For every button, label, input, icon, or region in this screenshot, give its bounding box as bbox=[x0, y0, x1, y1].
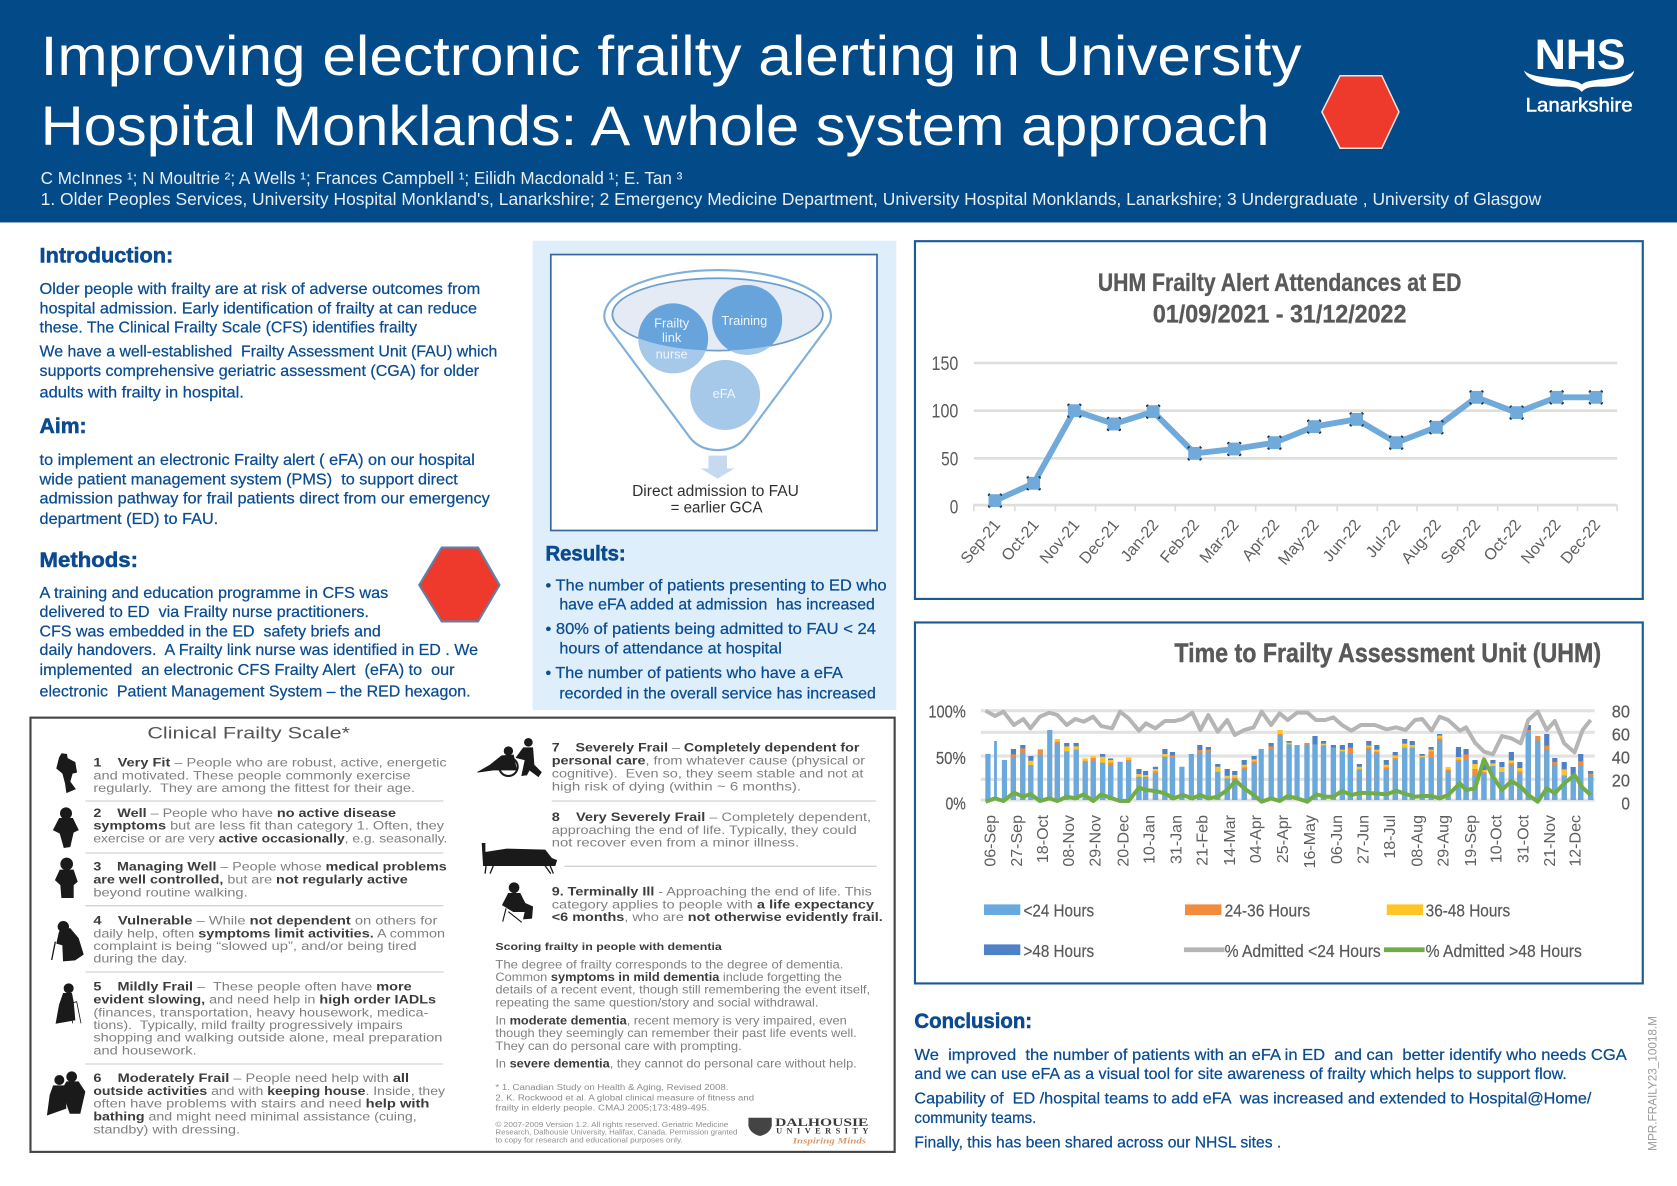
left axis labels bbox=[928, 703, 966, 813]
text block: results bullets: • 80% of patients being admitted to FAU < 24 bbox=[545, 621, 876, 638]
panel: aim bbox=[39, 415, 490, 528]
panel: funnel and results bbox=[533, 241, 896, 710]
y axis labels: 100 bbox=[932, 402, 958, 423]
x axis labels: Jan-22 bbox=[1117, 516, 1162, 565]
scale entries 7 to 9: 7 Severely Frail – Completely dependent for bbox=[552, 742, 860, 755]
scale entries 7 to 9 bbox=[552, 742, 883, 924]
x axis labels: Feb-22 bbox=[1157, 516, 1203, 567]
legend: <24 Hours bbox=[1024, 902, 1094, 921]
heading: results: Results: bbox=[545, 542, 626, 565]
text block: results bullets: • The number of patients presenting to ED who bbox=[545, 577, 887, 594]
x axis date labels: 31-Oct bbox=[1514, 814, 1532, 863]
x axis labels: Oct-21 bbox=[998, 516, 1043, 565]
right axis labels: 40 bbox=[1612, 749, 1630, 768]
text block: references: © 2007-2009 Version 1.2. All rights reserved. Geriatric Medicine bbox=[495, 1121, 729, 1129]
text block: results bullets bbox=[545, 577, 887, 702]
text block: references: to copy for research and educational purposes only. bbox=[495, 1137, 683, 1144]
text block: scoring frailty in dementia: The degree of frailty corresponds to the degree of dementia. bbox=[495, 958, 843, 971]
legend: 24-36 Hours bbox=[1225, 902, 1310, 921]
icons: frailty silhouettes 7 to 9 bbox=[477, 738, 557, 922]
scale entries 1 to 6: exercise or are very active occasionally , e.g. seasonally. bbox=[93, 833, 447, 846]
text block: scoring frailty in dementia: details of a recent event, though still remembering the event itself, bbox=[495, 984, 870, 997]
text block: conclusion bbox=[914, 1047, 1627, 1152]
text block: introduction: adults with frailty in hospital. bbox=[40, 385, 244, 402]
text block: aim: wide patient management system (PMS) to support direct bbox=[39, 471, 458, 488]
scale entries 1 to 6: 5 Mildly Frail – These people often have more bbox=[93, 981, 412, 994]
text block: aim: to implement an electronic Frailty alert ( eFA) on our hospital bbox=[40, 452, 475, 469]
text block: scoring frailty in dementia bbox=[495, 942, 870, 1071]
legend: % Admitted <24 Hours bbox=[1225, 942, 1381, 961]
x axis date labels: 12-Dec bbox=[1567, 815, 1585, 867]
x axis date labels: 20-Dec bbox=[1114, 815, 1132, 867]
scale entries 1 to 6: beyond routine walking. bbox=[93, 886, 248, 899]
scale entries 1 to 6: 2 Well – People who have no active disease bbox=[93, 807, 397, 820]
x axis labels: Mar-22 bbox=[1196, 516, 1243, 567]
right axis labels: 80 bbox=[1612, 703, 1630, 722]
scale entries 1 to 6: outside activities and with keeping house . Inside, they bbox=[93, 1085, 445, 1098]
text block: scoring frailty in dementia: Scoring frailty in people with dementia bbox=[495, 942, 722, 953]
scale entries 7 to 9: high risk of dying (within ~ 6 months). bbox=[552, 780, 801, 793]
text block: references bbox=[495, 1083, 754, 1144]
text block: methods: A training and education programme in CFS was bbox=[40, 585, 388, 602]
scale title: Clinical Frailty Scale* bbox=[147, 723, 351, 742]
x axis labels: Dec-22 bbox=[1557, 516, 1604, 567]
title bbox=[41, 25, 1302, 157]
x axis labels: May-22 bbox=[1275, 516, 1323, 569]
funnel diagram: Frailty bbox=[654, 315, 690, 330]
text block: methods bbox=[40, 585, 478, 700]
chart title: UHM Frailty Alert Attendances at ED bbox=[1098, 270, 1461, 297]
right column of scale bbox=[477, 738, 883, 1146]
scale entries 1 to 6: are well controlled, but are not regularly active bbox=[93, 874, 408, 887]
data markers bbox=[989, 391, 1602, 507]
panel: line chart of frailty alert attendances bbox=[915, 241, 1643, 599]
authors: C McInnes ¹; N Moultrie ²; A Wells ¹; Frances Campbell ¹; Eilidh Macdonald ¹; E. Tan ³ bbox=[41, 169, 683, 188]
text block: introduction bbox=[40, 281, 497, 402]
data line bbox=[995, 397, 1596, 501]
x axis date labels: 21-Nov bbox=[1541, 815, 1559, 867]
scale entries 1 to 6: symptoms but are less fit than category 1. Often, they bbox=[93, 820, 444, 833]
scale entries 1 to 6: evident slowing, and need help in high order IADLs bbox=[93, 994, 436, 1007]
x axis date labels bbox=[982, 814, 1585, 868]
heading: aim: Aim: bbox=[40, 415, 87, 438]
funnel caption: = earlier GCA bbox=[671, 500, 763, 517]
left axis labels: 100% bbox=[928, 703, 966, 722]
text block: conclusion: Capability of ED /hospital teams to add eFA was increased and extended to Hospital@Home/ bbox=[914, 1091, 1592, 1108]
text block: scoring frailty in dementia: Common symptoms in mild dementia include forgetting the bbox=[495, 971, 842, 984]
x axis date labels: 31-Jan bbox=[1167, 815, 1185, 864]
affiliations: 1. Older Peoples Services, University Hospital Monkland's, Lanarkshire; 2 Emergency Medicine Department, University Hospital Monklands, Lanarkshire; 3 Undergraduate , University of Glasgow bbox=[41, 190, 1542, 209]
legend: 36-48 Hours bbox=[1426, 902, 1510, 921]
icon: red hexagon bbox=[419, 548, 499, 621]
text block: references: frailty in elderly people. CMAJ 2005;173:489-495. bbox=[495, 1104, 709, 1113]
stacked bars and lines bbox=[986, 711, 1591, 802]
scale entries 7 to 9: <6 months , who are not otherwise evidently frail. bbox=[552, 911, 883, 924]
panel: conclusion bbox=[914, 1010, 1627, 1152]
logo: Dalhousie University: UNIVERSITY bbox=[776, 1127, 868, 1136]
right axis labels: 60 bbox=[1612, 726, 1630, 745]
right axis labels bbox=[1612, 703, 1630, 813]
x axis labels: Sep-21 bbox=[957, 516, 1004, 567]
text block: methods: delivered to ED via Frailty nurse practitioners. bbox=[40, 604, 369, 621]
x axis labels: Jul-22 bbox=[1362, 516, 1404, 561]
text block: scoring frailty in dementia: In severe dementia, they cannot do personal care without help. bbox=[495, 1058, 857, 1071]
x axis date labels: 14-Mar bbox=[1221, 814, 1239, 866]
line: percent admitted over 48 hours bbox=[986, 759, 1591, 802]
funnel diagram: Training bbox=[721, 313, 767, 328]
funnel caption: Direct admission to FAU bbox=[632, 483, 799, 500]
funnel diagram: nurse bbox=[656, 346, 688, 361]
text block: methods: implemented an electronic CFS Frailty Alert (eFA) to our bbox=[40, 662, 455, 679]
icon: red hexagon alert bbox=[1322, 76, 1399, 148]
logo: Dalhousie University: Inspiring Minds bbox=[791, 1137, 866, 1146]
y axis labels: 150 bbox=[932, 354, 958, 375]
title: Improving electronic frailty alerting in University bbox=[41, 25, 1302, 87]
text block: introduction: these. The Clinical Frailty Scale (CFS) identifies frailty bbox=[40, 319, 417, 336]
scale entries 1 to 6: 3 Managing Well – People whose medical problems bbox=[93, 861, 447, 874]
scale entries 1 to 6: daily help, often symptoms limit activities. A common bbox=[93, 927, 445, 940]
text block: results bullets: hours of attendance at hospital bbox=[559, 640, 782, 657]
scale entries 1 to 6: tions). Typically, mild frailty progressively impairs bbox=[93, 1019, 403, 1032]
panel: introduction bbox=[40, 245, 497, 402]
heading: conclusion: Conclusion: bbox=[914, 1010, 1032, 1033]
reference code: MPR.FRAILY23_10018.M bbox=[1646, 1016, 1660, 1151]
x axis date labels: 18-Jul bbox=[1381, 815, 1399, 859]
x axis date labels: 08-Nov bbox=[1060, 815, 1078, 867]
text block: results bullets: have eFA added at admission has increased bbox=[559, 597, 875, 614]
text block: scoring frailty in dementia: repeating the same question/story and social withdrawal. bbox=[495, 997, 818, 1010]
scale entries 7 to 9: approaching the end of life. Typically, they could bbox=[552, 824, 857, 837]
text block: references: * 1. Canadian Study on Health & Aging, Revised 2008. bbox=[495, 1083, 728, 1092]
scale entries 1 to 6: 4 Vulnerable – While not dependent on others for bbox=[93, 914, 438, 927]
arrow: funnel output bbox=[701, 456, 734, 479]
scale entries 7 to 9: 8 Very Severely Frail – Completely dependent, bbox=[552, 811, 871, 824]
logo: NHS Lanarkshire bbox=[1524, 31, 1634, 117]
x axis labels: Oct-22 bbox=[1480, 516, 1525, 565]
scale entries 1 to 6: bathing and might need minimal assistance (cuing, bbox=[93, 1110, 417, 1123]
funnel diagram: eFA bbox=[713, 386, 736, 401]
x axis date labels: 10-Oct bbox=[1488, 814, 1506, 863]
scale entries 1 to 6: (finances, transportation, heavy housework, medica- bbox=[93, 1006, 429, 1019]
text block: introduction: supports comprehensive geriatric assessment (CGA) for older bbox=[40, 363, 479, 380]
x axis date labels: 08-Aug bbox=[1408, 815, 1426, 867]
text block: references: Research, Dalhousie University, Halifax, Canada. Permission granted bbox=[495, 1130, 738, 1137]
text block: conclusion: Finally, this has been shared across our NHSL sites . bbox=[914, 1135, 1281, 1152]
y axis labels: 50 bbox=[941, 450, 958, 471]
y axis labels bbox=[932, 354, 958, 518]
funnel diagram: link bbox=[662, 330, 682, 345]
header banner bbox=[0, 0, 1677, 222]
scale entries 7 to 9: 9. Terminally Ill - Approaching the end of life. This bbox=[552, 885, 872, 898]
x axis labels: Jun-22 bbox=[1319, 516, 1365, 565]
logo: Dalhousie University bbox=[748, 1115, 868, 1146]
x axis labels: Sep-22 bbox=[1437, 516, 1484, 567]
scale entries 1 to 6: during the day. bbox=[93, 953, 187, 966]
right axis labels: 0 bbox=[1621, 794, 1630, 813]
funnel caption bbox=[632, 483, 799, 517]
scale entries 1 to 6: 6 Moderately Frail – People need help with all bbox=[93, 1072, 409, 1085]
text block: conclusion: community teams. bbox=[914, 1110, 1036, 1127]
text block: introduction: Older people with frailty are at risk of adverse outcomes from bbox=[40, 281, 480, 298]
scale entries 7 to 9: cognitive). Even so, they seem stable and not at bbox=[552, 767, 864, 780]
left axis labels: 50% bbox=[936, 749, 966, 768]
icons: frailty silhouettes 1 to 6 bbox=[47, 754, 85, 1115]
left axis labels: 0% bbox=[945, 794, 966, 813]
line: percent admitted under 24 hours bbox=[986, 711, 1591, 754]
x axis date labels: 27-Sep bbox=[1008, 815, 1026, 867]
chart title bbox=[1098, 270, 1461, 328]
scale entries 7 to 9: category applies to people with a life expectancy bbox=[552, 898, 875, 911]
text block: introduction: We have a well-established Frailty Assessment Unit (FAU) which bbox=[40, 344, 497, 361]
x axis labels bbox=[957, 516, 1604, 569]
heading: introduction: Introduction: bbox=[40, 245, 173, 268]
text block: methods: daily handovers. A Frailty link nurse was identified in ED . We bbox=[40, 642, 478, 659]
scale entries 1 to 6: 1 Very Fit – People who are robust, active, energetic bbox=[93, 757, 447, 770]
funnel diagram bbox=[551, 255, 877, 530]
text block: scoring frailty in dementia: In moderate dementia , recent memory is very impaired, even bbox=[495, 1014, 847, 1027]
text block: conclusion: and we can use eFA as a visual tool for site awareness of frailty which helps to support flow. bbox=[914, 1066, 1567, 1083]
text block: references: 2. K. Rockwood et al. A global clinical measure of fitness and bbox=[495, 1094, 754, 1103]
x axis date labels: 21-Feb bbox=[1193, 815, 1211, 866]
x axis date labels: 04-Apr bbox=[1247, 814, 1265, 863]
right axis labels: 20 bbox=[1612, 772, 1630, 791]
text block: aim: admission pathway for frail patients direct from our emergency bbox=[40, 491, 490, 508]
scale entries 1 to 6: and motivated. These people commonly exercise bbox=[93, 769, 411, 782]
scale entries 1 to 6: complaint is being “slowed up”, and/or being tired bbox=[93, 940, 417, 953]
scale entries 1 to 6 bbox=[93, 757, 447, 1136]
x axis date labels: 18-Oct bbox=[1034, 814, 1052, 863]
x axis labels: Apr-22 bbox=[1239, 516, 1283, 565]
panel: time to frailty assessment unit chart bbox=[915, 622, 1643, 983]
x axis labels: Nov-22 bbox=[1518, 516, 1565, 567]
text block: scoring frailty in dementia: They can do personal care with prompting. bbox=[495, 1040, 742, 1053]
chart title: Time to Frailty Assessment Unit (UHM) bbox=[1174, 638, 1601, 668]
x axis date labels: 25-Apr bbox=[1274, 814, 1292, 863]
x axis date labels: 06-Jun bbox=[1328, 815, 1346, 864]
x axis date labels: 06-Sep bbox=[982, 815, 1000, 867]
scale entries 1 to 6: standby) with dressing. bbox=[93, 1123, 240, 1136]
heading: methods: Methods: bbox=[40, 549, 138, 572]
x axis date labels: 27-Jun bbox=[1354, 815, 1372, 864]
x axis date labels: 29-Nov bbox=[1087, 815, 1105, 867]
scale entries 7 to 9: not recover even from a minor illness. bbox=[552, 837, 799, 850]
legend: >48 Hours bbox=[1024, 942, 1094, 961]
title: Hospital Monklands: A whole system approach bbox=[41, 95, 1270, 157]
logo: NHS Lanarkshire: Lanarkshire bbox=[1526, 96, 1633, 117]
scale entries 1 to 6: and housework. bbox=[93, 1044, 197, 1057]
x axis labels: Dec-21 bbox=[1076, 516, 1123, 567]
x axis labels: Aug-22 bbox=[1398, 516, 1445, 567]
panel: methods bbox=[40, 548, 499, 700]
logo: NHS Lanarkshire: NHS bbox=[1535, 31, 1626, 79]
logo: Dalhousie University: DALHOUSIE bbox=[775, 1115, 868, 1129]
x axis labels: Nov-21 bbox=[1036, 516, 1083, 567]
chart title: 01/09/2021 - 31/12/2022 bbox=[1153, 301, 1406, 328]
scale entries 1 to 6: shopping and walking outside alone, meal preparation bbox=[93, 1032, 442, 1045]
scale entries 7 to 9: personal care , from whatever cause (physical or bbox=[552, 755, 865, 768]
panel: clinical frailty scale bbox=[30, 718, 895, 1152]
text block: results bullets: • The number of patients who have a eFA bbox=[545, 665, 843, 682]
text block: methods: electronic Patient Management System – the RED hexagon. bbox=[40, 683, 471, 700]
y axis labels: 0 bbox=[950, 497, 958, 518]
scale entries 1 to 6: regularly. They are among the fittest for their age. bbox=[93, 782, 415, 795]
x axis date labels: 19-Sep bbox=[1462, 815, 1480, 867]
text block: introduction: hospital admission. Early identification of frailty at can reduce bbox=[40, 300, 477, 317]
text block: aim: department (ED) to FAU. bbox=[40, 511, 218, 528]
text block: conclusion: We improved the number of patients with an eFA in ED and can better identify who needs CGA bbox=[914, 1047, 1627, 1064]
text block: aim bbox=[39, 452, 490, 528]
x axis date labels: 29-Aug bbox=[1435, 815, 1453, 867]
legend bbox=[984, 902, 1582, 961]
legend: % Admitted >48 Hours bbox=[1426, 942, 1582, 961]
text block: results bullets: recorded in the overall service has increased bbox=[559, 685, 876, 702]
scale entries 1 to 6: often have problems with stairs and need help with bbox=[93, 1098, 429, 1111]
text block: scoring frailty in dementia: though they seemingly can remember their past life events well. bbox=[495, 1027, 857, 1040]
x axis date labels: 10-Jan bbox=[1141, 815, 1159, 864]
left column of scale bbox=[47, 723, 447, 1136]
text block: methods: CFS was embedded in the ED safety briefs and bbox=[40, 623, 381, 640]
x axis date labels: 16-May bbox=[1301, 815, 1319, 868]
